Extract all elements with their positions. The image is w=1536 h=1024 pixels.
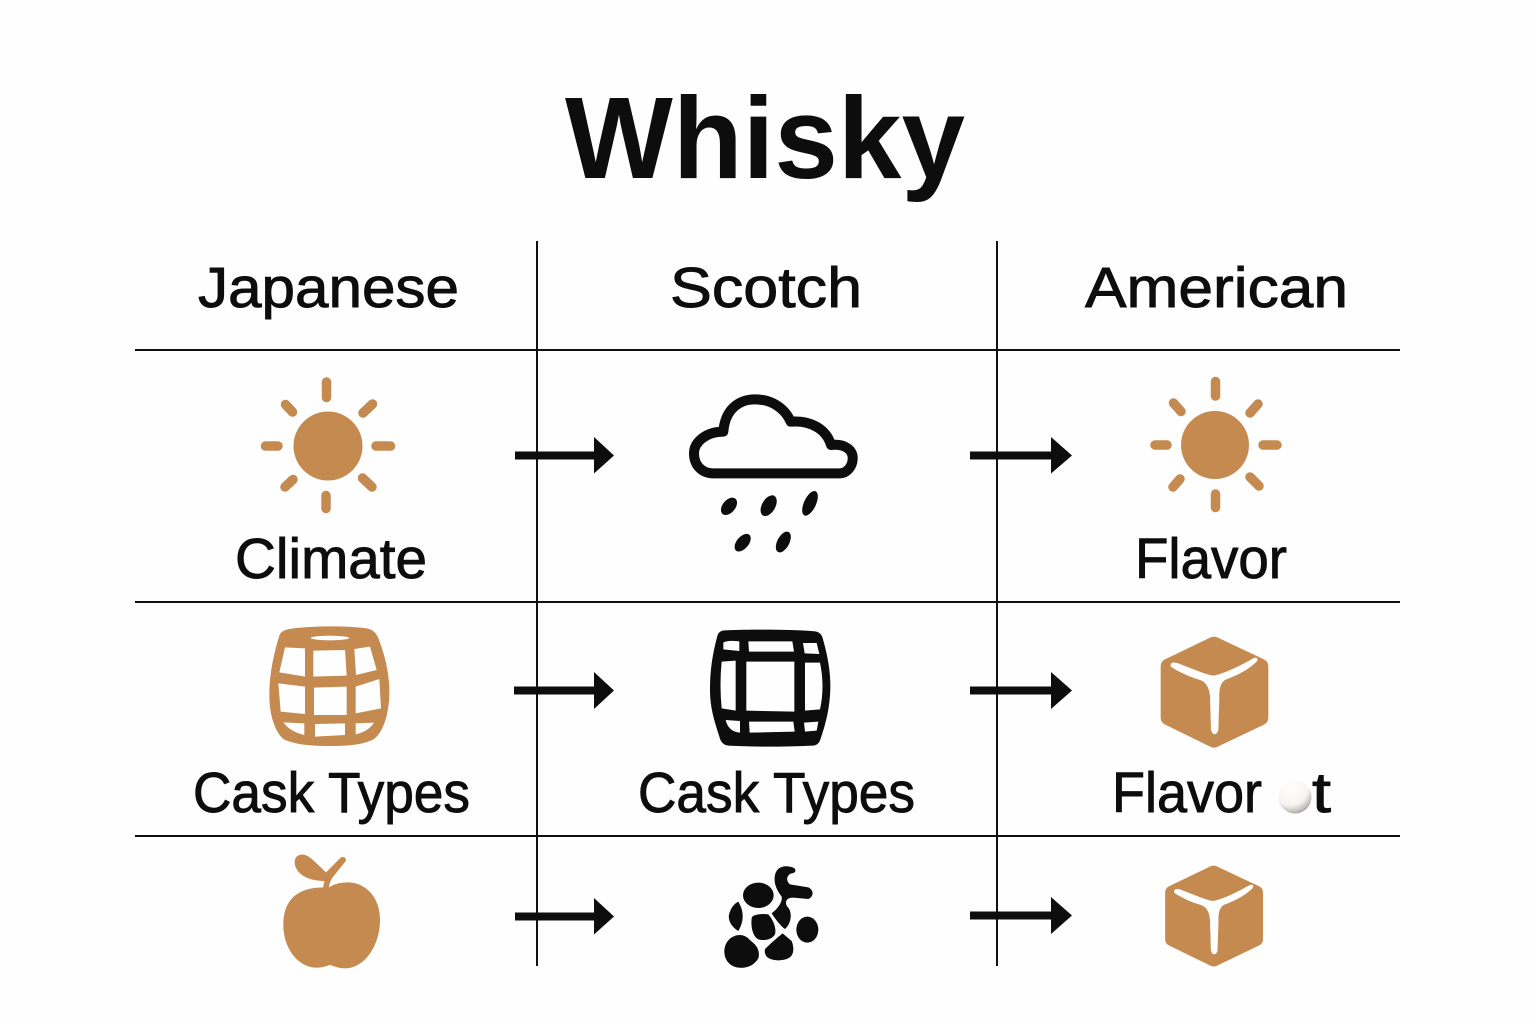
label: Flavor: Flavor: [1135, 527, 1287, 591]
arrow: Japanese climate to Scotch: [515, 437, 614, 474]
icon: small orange cube: [1172, 873, 1256, 960]
arrow: Scotch cask to American: [970, 672, 1072, 709]
column heading: American: American: [1085, 256, 1348, 320]
icon: grapes: [724, 866, 818, 968]
icon: sun, American flavor: [1155, 382, 1277, 508]
arrow: Japanese cask to Scotch: [514, 672, 614, 709]
label: Flavor with glitch ball: t: [1312, 761, 1331, 825]
icon: rain cloud: [694, 399, 853, 555]
label: Climate: Climate: [235, 527, 427, 591]
icon: orange cube: [1168, 644, 1261, 740]
label: Flavor with glitch ball: Flavor: [1112, 761, 1262, 825]
title: Whisky: [565, 73, 965, 203]
icon: sun, Japanese climate: [266, 382, 390, 508]
icon: apple: [283, 854, 380, 968]
label: Cask Types, Scotch: Cask Types: [638, 761, 915, 825]
column heading: Japanese: Japanese: [198, 256, 459, 320]
icon: black barrel: [710, 630, 830, 747]
column heading: Scotch: Scotch: [670, 256, 862, 320]
arrow: Scotch climate to American: [970, 437, 1072, 474]
label: Cask Types, Japanese: Cask Types: [193, 761, 470, 825]
arrow: Japanese fruit to Scotch: [515, 898, 614, 934]
arrow: Scotch fruit to American: [970, 897, 1072, 934]
icon: orange barrel: [269, 626, 389, 746]
